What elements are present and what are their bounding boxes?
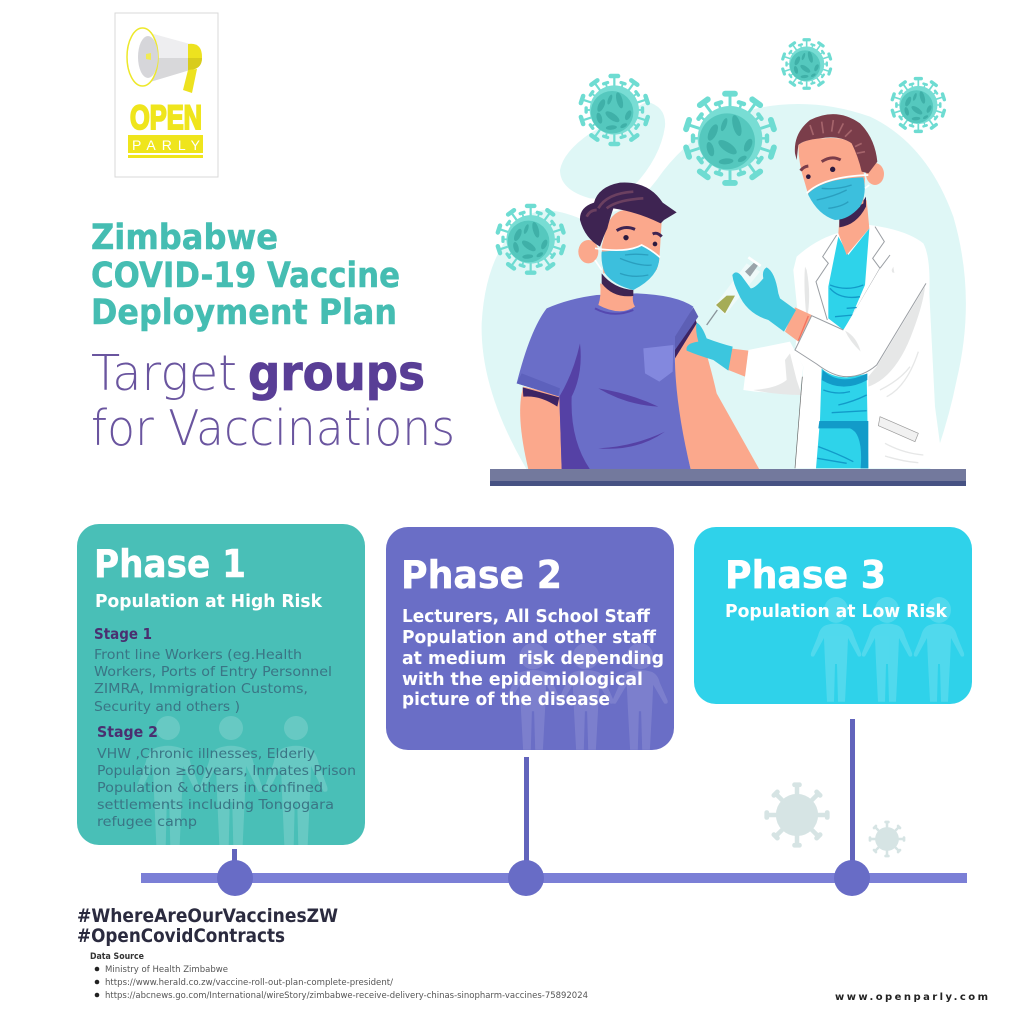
neck <box>838 200 869 255</box>
right sleeve <box>795 268 926 377</box>
hashtags <box>77 905 338 947</box>
data sources: https://abcnews.go.com/International/wireStory/zimbabwe-receive-delivery-chinas-sinopharm-vaccines-75892024 <box>105 991 588 1001</box>
title: deployment plan <box>91 218 400 333</box>
heading: phase 1: Phase 1 <box>94 542 246 586</box>
text: phase 2 groups <box>402 606 664 710</box>
website: www.openparly.com <box>835 992 988 1003</box>
table <box>490 469 966 486</box>
title: deployment plan: COVID-19 Vaccine <box>91 256 400 296</box>
subheading: low risk: Population at Low Risk <box>725 601 948 622</box>
text: stage 2: VHW ,Chronic illnesses, Elderly <box>97 746 315 762</box>
text: stage 2: Population ≥60years, Inmates Prison <box>97 763 356 779</box>
scrubs <box>828 228 869 330</box>
panel: phase 3 <box>694 527 972 704</box>
text: stage 1 <box>94 625 332 715</box>
patient <box>517 182 759 469</box>
text: stage 2: settlements including Tongogara <box>97 797 334 813</box>
subheading: high risk: Population at High Risk <box>95 591 323 612</box>
wrist: lower hand <box>728 348 748 377</box>
logo wordmark: PARLY <box>128 135 203 158</box>
data sources: Ministry of Health Zimbabwe <box>105 965 228 975</box>
data sources: https://www.herald.co.zw/vaccine-roll-out-plan-complete-president/ <box>105 978 393 988</box>
lapels and edges <box>816 227 890 320</box>
illustration: vaccination scene <box>482 38 966 469</box>
title: deployment plan: Deployment Plan <box>91 293 397 333</box>
hair <box>795 114 877 173</box>
wrist <box>785 307 812 342</box>
text: stage 1: Front line Workers (eg.Health <box>94 647 302 663</box>
doctor <box>686 114 943 468</box>
panel: phase 1 <box>77 524 365 854</box>
subtitle: target groups: for Vaccinations <box>91 400 455 457</box>
text: stage 2 <box>97 723 356 830</box>
text: stage 1: Security and others ) <box>94 699 240 715</box>
subtitle: target groups <box>91 345 455 457</box>
subtitle: target groups: Target <box>91 345 237 402</box>
background blobs <box>482 102 966 469</box>
title: deployment plan: Zimbabwe <box>91 218 278 258</box>
text: phase 2 groups: Population and other staff <box>402 627 656 648</box>
text: phase 2 groups: at medium risk depending <box>402 648 664 669</box>
text: phase 2 groups: picture of the disease <box>402 689 610 710</box>
text: stage 1: Workers, Ports of Entry Personnel <box>94 664 332 680</box>
heading: phase 2: Phase 2 <box>401 553 562 597</box>
logo: Open Parly <box>115 13 218 177</box>
text: stage 2: Stage 2 <box>97 723 158 741</box>
text: stage 1: ZIMRA, Immigration Customs, <box>94 681 308 697</box>
data sources <box>90 952 588 1001</box>
text: stage 2: refugee camp <box>97 814 197 830</box>
stem and node: phase 2 <box>508 757 544 896</box>
data sources: Data Source <box>90 952 144 962</box>
text: phase 2 groups: Lecturers, All School Staff <box>402 606 650 627</box>
panel: phase 2 <box>386 527 674 750</box>
text: stage 1: Stage 1 <box>94 625 152 643</box>
heading: phase 3: Phase 3 <box>725 553 886 597</box>
hashtags: #OpenCovidContracts <box>77 925 285 947</box>
subtitle: target groups: groups <box>248 345 425 402</box>
pocket <box>878 417 918 442</box>
mask <box>808 177 865 220</box>
coat body <box>793 225 943 468</box>
text: phase 2 groups: with the epidemiological <box>402 669 643 690</box>
icon: megaphone <box>127 28 202 93</box>
hashtags: #WhereAreOurVaccinesZW <box>77 905 338 927</box>
stem and node: phase 3 <box>834 719 870 896</box>
icon: grey viruses <box>764 782 905 857</box>
gloves <box>732 267 796 332</box>
face <box>798 138 865 217</box>
logo wordmark: PARLY: PARLY <box>132 137 201 153</box>
stem and node: phase 1 <box>217 849 253 896</box>
logo wordmark: OPEN: OPEN <box>130 99 202 137</box>
viruses <box>495 38 947 275</box>
text: stage 2: Population & others in confined <box>97 780 323 796</box>
left sleeve <box>743 342 803 392</box>
syringe <box>707 257 761 325</box>
timeline <box>141 719 967 896</box>
